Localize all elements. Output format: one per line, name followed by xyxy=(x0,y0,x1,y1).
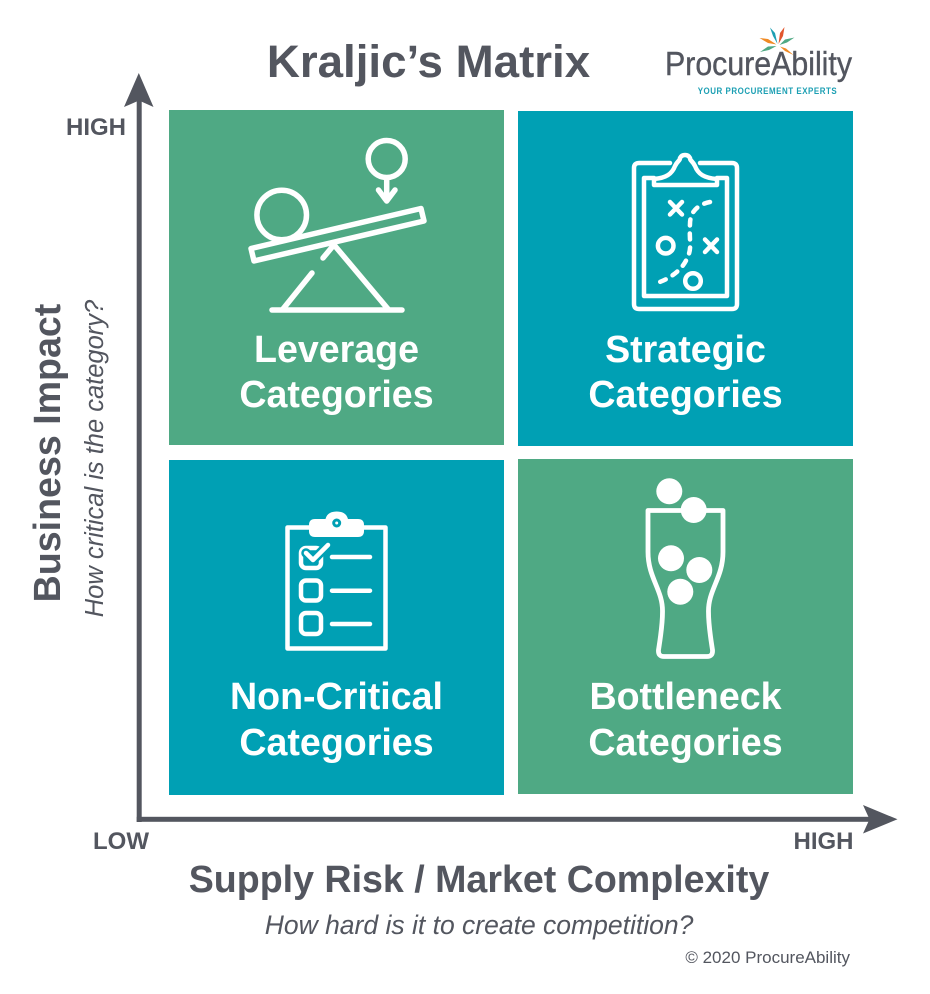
horizontal axis arrow xyxy=(137,805,897,834)
subheading: how critical: How critical is the category? xyxy=(81,299,109,617)
logo tagline: YOUR PROCUREMENT EXPERTS xyxy=(698,86,837,96)
title: Kraljic’s Matrix xyxy=(267,36,591,87)
panel label line 2: Categories xyxy=(239,721,434,763)
panel label line 2: Categories xyxy=(588,373,783,415)
subheading: how hard: How hard is it to create competition? xyxy=(265,910,694,940)
panel label line 2: Categories xyxy=(588,721,783,763)
copyright: © 2020 ProcureAbility xyxy=(685,948,850,967)
panel label: Strategic xyxy=(605,328,766,370)
panel label: Non-Critical xyxy=(230,675,443,717)
label: horizontal axis low: LOW xyxy=(93,828,149,855)
panel label: Bottleneck xyxy=(589,675,782,717)
icon: seesaw xyxy=(251,140,424,310)
panel: strategic categories xyxy=(518,111,853,446)
vertical axis arrow xyxy=(124,73,154,822)
logo wordmark: ProcureAbility xyxy=(665,45,852,82)
icon: checklist clipboard xyxy=(288,512,386,648)
label: horizontal axis high: HIGH xyxy=(794,828,854,855)
heading: business impact: Business Impact xyxy=(26,303,68,602)
panel: non-critical categories xyxy=(169,460,504,795)
panel label line 2: Categories xyxy=(239,373,434,415)
logo: ProcureAbility xyxy=(665,27,852,96)
panel: bottleneck categories xyxy=(518,459,853,794)
icon: playbook clipboard xyxy=(634,155,737,309)
panel label: Leverage xyxy=(254,328,419,370)
panel: leverage categories xyxy=(169,110,504,445)
heading: supply risk: Supply Risk / Market Complexity xyxy=(189,858,769,900)
label: vertical axis high: HIGH xyxy=(66,114,126,141)
icon: logo star xyxy=(760,27,794,55)
icon: beer glass with bubbles xyxy=(648,478,723,656)
